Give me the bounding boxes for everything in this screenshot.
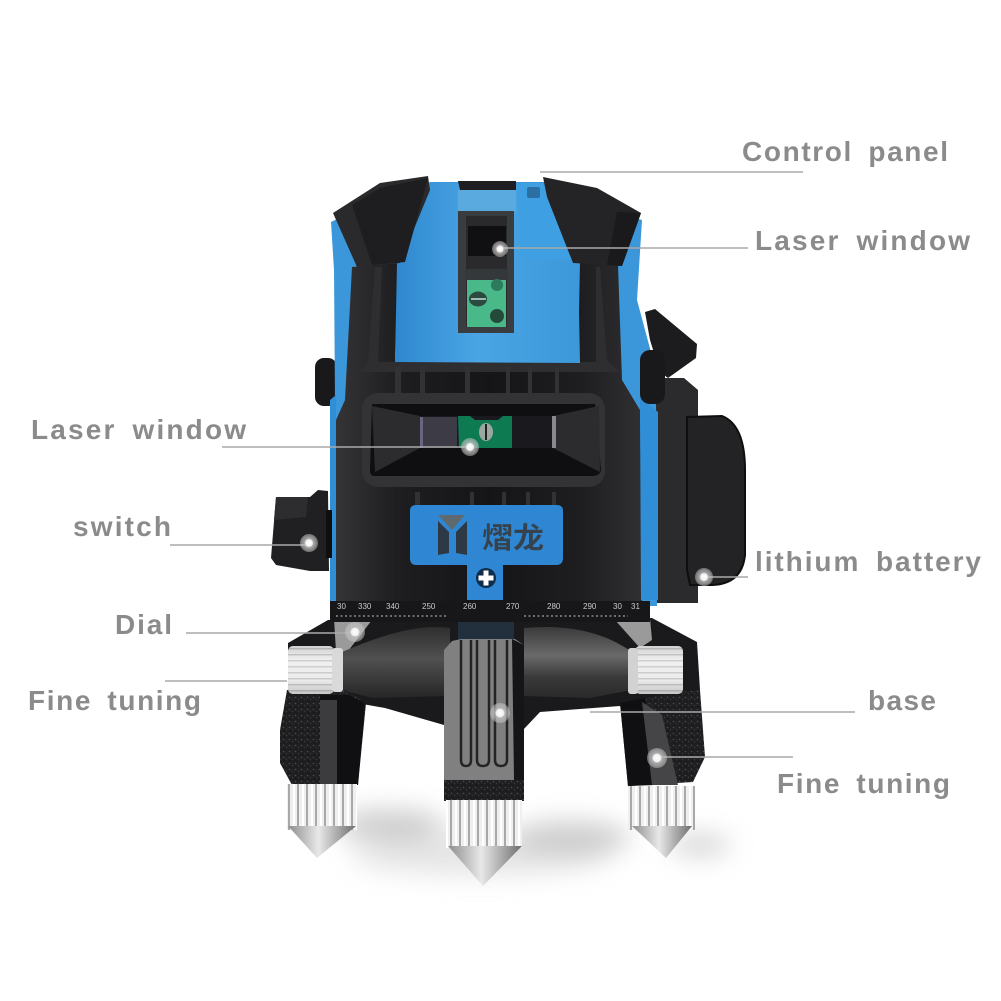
- callout: right fine tuning: Fine tuning: [777, 768, 950, 799]
- callout: dial: Dial: [115, 609, 172, 640]
- dial: 250: [422, 602, 436, 611]
- floor shadows: [335, 810, 730, 875]
- dial: 30: [613, 602, 622, 611]
- dial: 330: [358, 602, 372, 611]
- right leg and foot: [620, 690, 705, 858]
- dial: 340: [386, 602, 400, 611]
- lower laser window housing: [362, 393, 605, 487]
- callout: lower laser window: [31, 414, 479, 456]
- logo mark: [438, 515, 467, 555]
- rotary switch: [271, 490, 332, 571]
- base: [288, 612, 700, 730]
- callout: left fine tuning: Fine tuning: [28, 685, 201, 716]
- grip ribs: [395, 367, 559, 506]
- carry handle and right knob: [640, 309, 697, 404]
- right thumb wheel: [628, 646, 683, 694]
- top blue panel: [395, 181, 580, 363]
- centre leg and foot: [444, 639, 524, 886]
- dial: 260: [463, 602, 477, 611]
- callout: switch: [73, 511, 318, 552]
- dial: [330, 601, 650, 622]
- callout: lithium battery: lithium battery: [755, 546, 981, 577]
- callout: dial: [115, 609, 365, 642]
- callout: lithium battery: [695, 546, 981, 586]
- top caps: [333, 176, 641, 267]
- dial: 290: [583, 602, 597, 611]
- battery pack: [652, 378, 745, 603]
- callout: right fine tuning: [647, 748, 950, 799]
- brand plate: [410, 505, 563, 600]
- logo text: 熠龙: [482, 515, 544, 557]
- dial: 270: [506, 602, 520, 611]
- left side knob: [315, 358, 337, 406]
- callout: switch: switch: [73, 511, 171, 542]
- callout: upper laser window: Laser window: [755, 225, 970, 256]
- callout: upper laser window: [492, 225, 970, 257]
- callout: lower laser window: Laser window: [31, 414, 246, 445]
- left thumb wheel: [288, 646, 343, 694]
- callout: control panel: Control panel: [742, 136, 948, 167]
- left leg and foot: [280, 690, 366, 858]
- dial: 280: [547, 602, 561, 611]
- callout: base: [490, 685, 936, 723]
- dial: 31: [631, 602, 640, 611]
- main housing: [330, 182, 658, 606]
- callout: base: base: [868, 685, 936, 716]
- dial: 30: [337, 602, 346, 611]
- upper laser window: [458, 211, 514, 333]
